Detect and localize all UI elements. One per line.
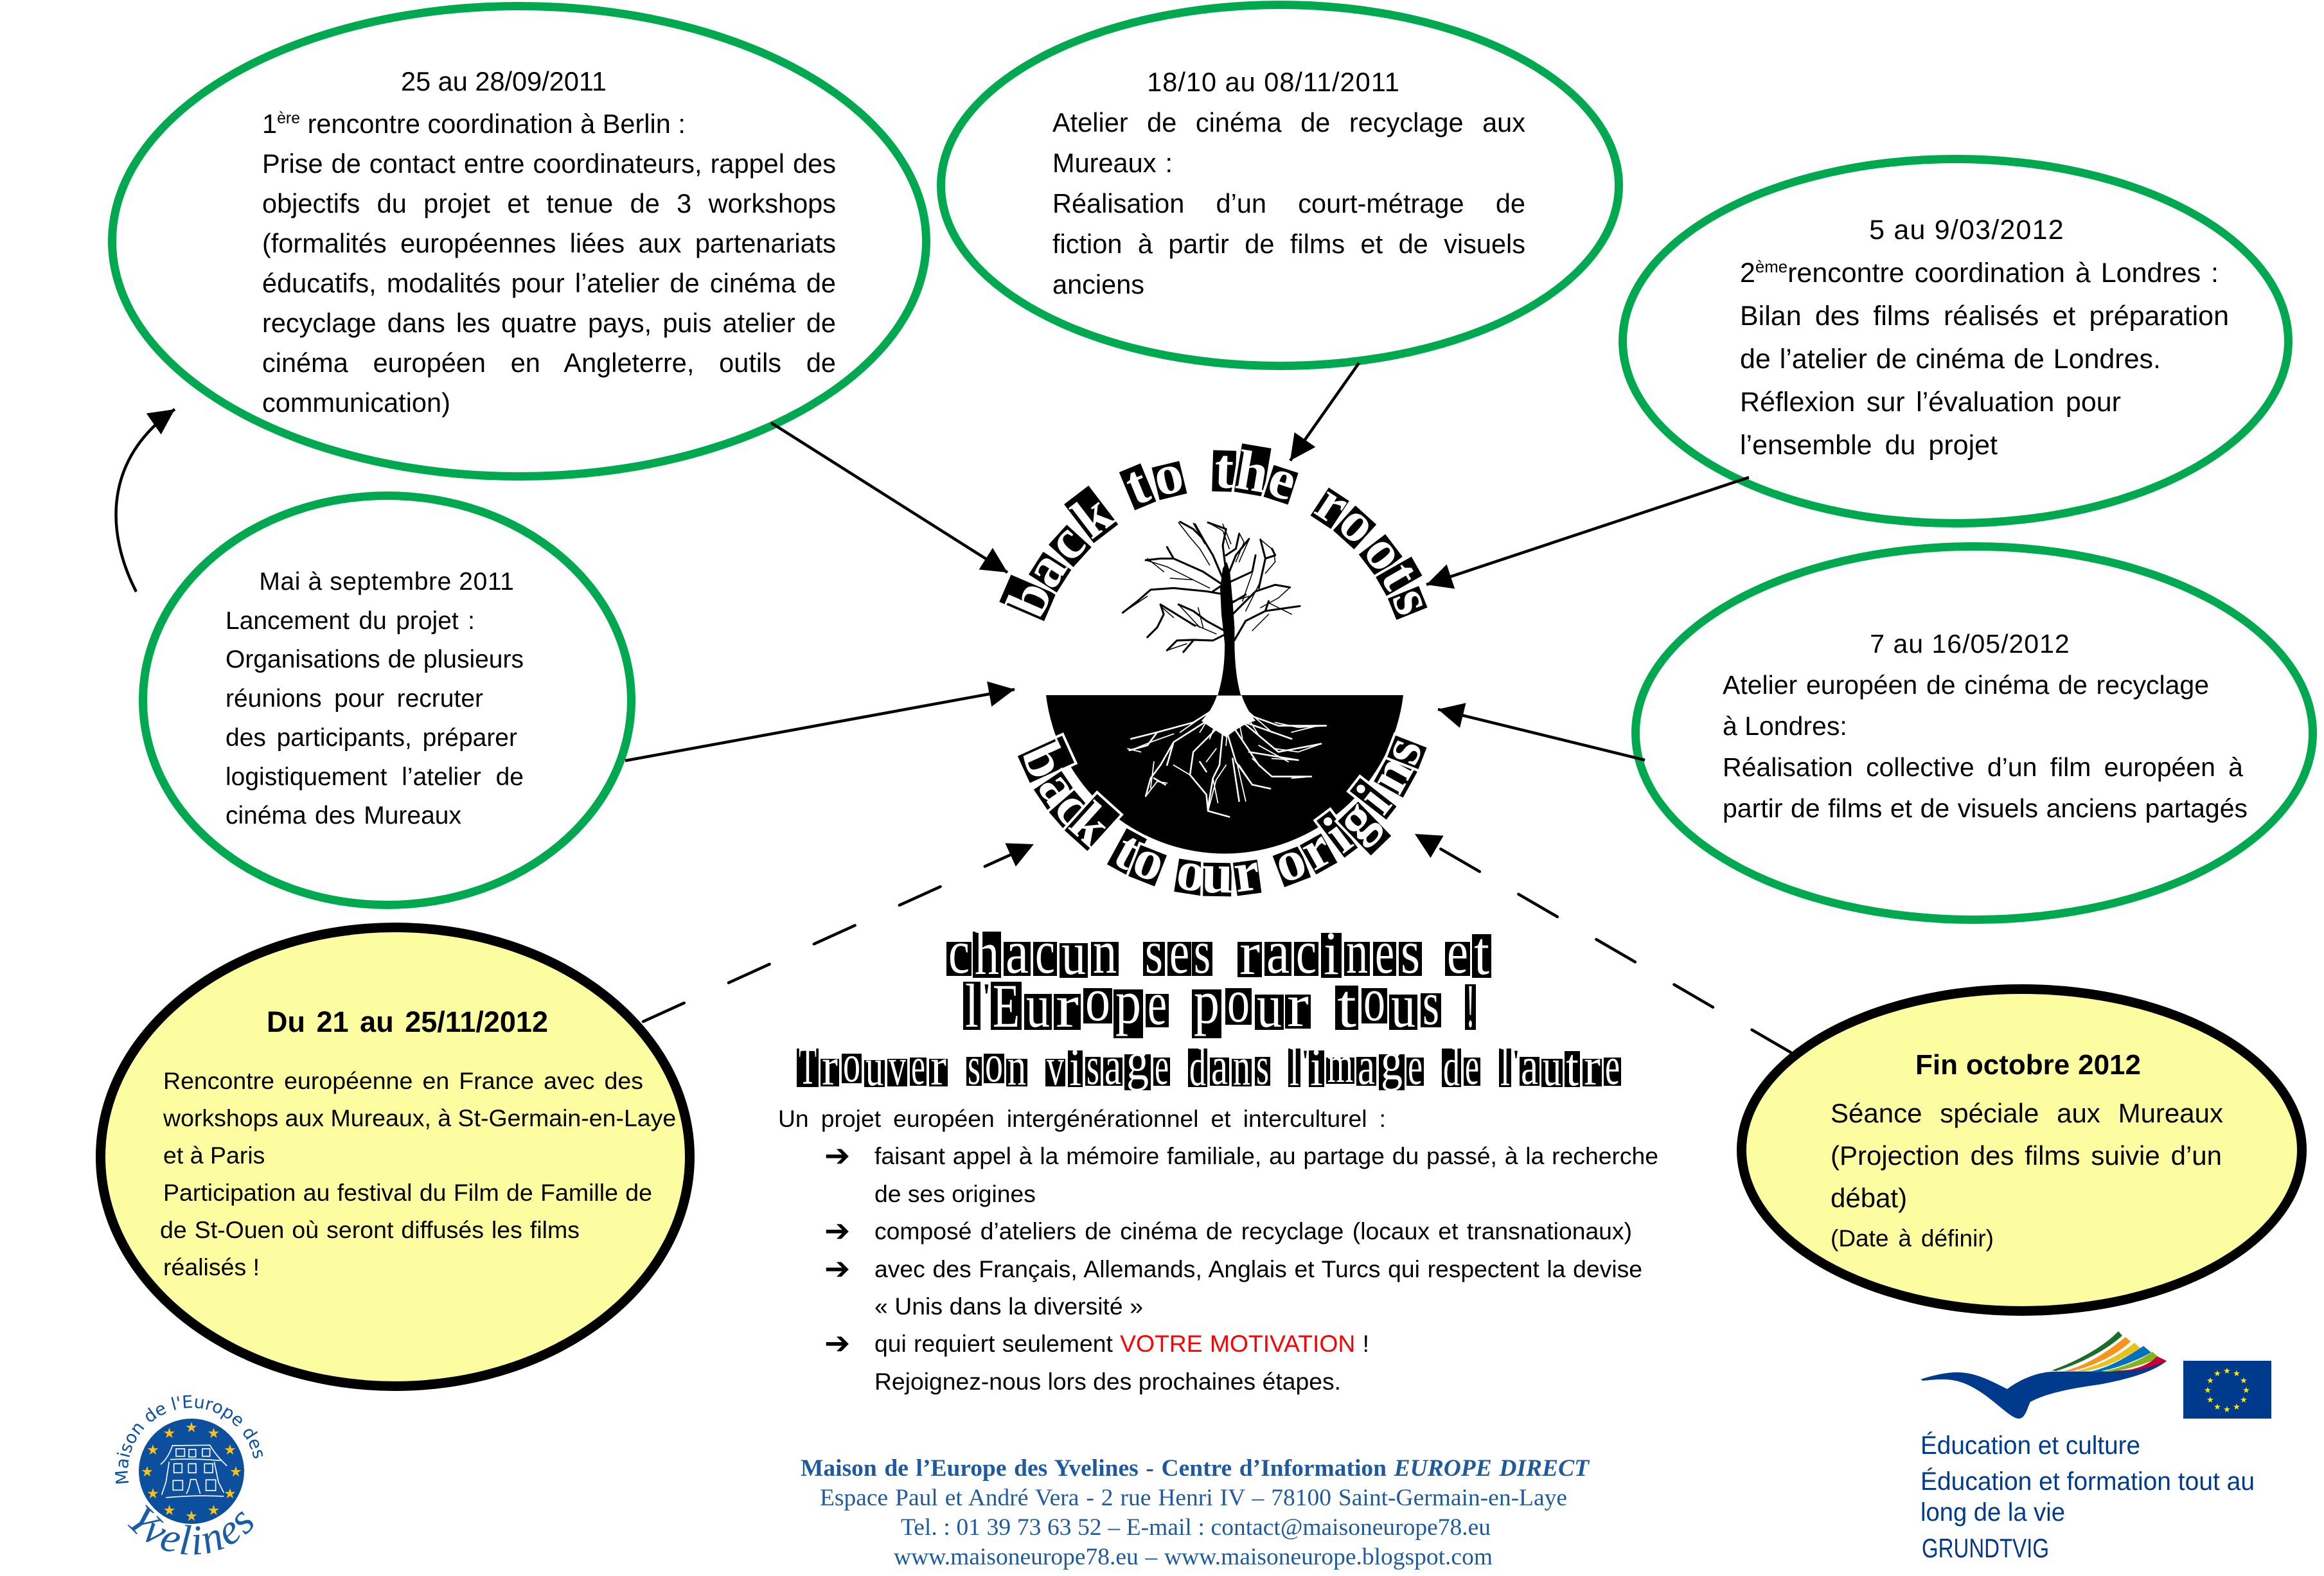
text: project launch: cinéma des Mureaux: [226, 802, 461, 829]
text: Mureaux workshop: Atelier de cinéma de recyclage aux: [1052, 107, 1525, 137]
text: meeting in France: Rencontre européenne en France avec des: [163, 1067, 643, 1094]
bullet 4: qui requiert seulement VOTRE MOTIVATION !: [874, 1330, 1369, 1357]
logo: Maison de l'Europe des Yvelines: ★: [163, 1503, 175, 1519]
bullet 1: ➔: [824, 1138, 850, 1174]
title: chacun ses racines et: r: [1239, 919, 1260, 987]
text: special screening: (Date à définir): [1831, 1225, 1994, 1252]
logo lettering: back to our origins: i: [1345, 774, 1403, 825]
logo: Maison de l'Europe des Yvelines: ★: [224, 1442, 236, 1458]
text: London workshop: Atelier européen de cinéma de recyclage: [1723, 670, 2209, 700]
subtitle: Trouver son visage dans l'image de l'autre: ': [1302, 1043, 1308, 1079]
subtitle: Trouver son visage dans l'image de l'autre: a: [1211, 1036, 1228, 1096]
arrow: curved launch to Berlin: [116, 409, 175, 592]
subtitle: Trouver son visage dans l'image de l'autre: l: [1500, 1038, 1510, 1097]
subtitle: Trouver son visage dans l'image de l'autre: s: [1256, 1036, 1269, 1096]
arrow: launch to logo: [625, 689, 1015, 761]
logo lettering: back to our origins: u: [1201, 843, 1234, 905]
icon: EU flag: ★: [2240, 1395, 2248, 1405]
bullet 2: ➔: [824, 1213, 850, 1249]
subtitle: Trouver son visage dans l'image de l'autre: i: [1069, 1038, 1081, 1097]
panel: 18/10 au 08/11/2011 recycling cinema workshop: [937, 1, 1623, 370]
title: l'Europe pour tous !: p: [1115, 968, 1141, 1036]
subtitle: Trouver son visage dans l'image de l'autre: g: [1381, 1032, 1403, 1092]
subtitle: Trouver son visage dans l'image de l'autre: d: [1189, 1038, 1206, 1097]
title: chacun ses racines et: s: [1401, 917, 1420, 986]
logo lettering: back to the roots: k: [1061, 482, 1124, 551]
subtitle: Trouver son visage dans l'image de l'autre: a: [1521, 1036, 1538, 1096]
title: l'Europe pour tous !: r: [1056, 971, 1079, 1040]
title: chacun ses racines et: i: [1324, 919, 1339, 987]
logo lettering: back to our origins: a: [1026, 759, 1094, 818]
logo lettering: back to our origins: r: [1290, 816, 1342, 883]
icon: EU flag: ★: [2242, 1386, 2250, 1395]
title: l'Europe pour tous !: p: [1194, 968, 1220, 1036]
text: Education et culture GRUNDTVIG: long de la vie: [1920, 1498, 2065, 1527]
text: meeting in France: de St-Ouen où seront diffusés les films: [160, 1216, 580, 1243]
text: project launch: logistiquement l’atelier de: [226, 763, 524, 791]
text: meeting in France: workshops aux Mureaux, à St-Germain-en-Laye: [163, 1104, 676, 1131]
text: !: [1466, 971, 1475, 1040]
subtitle: Trouver son visage dans l'image de l'autre: e: [1605, 1036, 1620, 1096]
logo: Maison de l'Europe des Yvelines: ★: [185, 1509, 198, 1525]
bullet 1: de ses origines: [874, 1180, 1036, 1207]
title: l'Europe pour tous !: t: [1337, 971, 1356, 1040]
title: l'Europe pour tous !: r: [1287, 971, 1309, 1040]
logo lettering: back to the roots: s: [1379, 579, 1446, 623]
panel: 5 au 9/03/2012 London coordination meeting: [1619, 155, 2293, 527]
footer: contact details: Maison de l’Europe des Yvelines - Centre d’Information EUROPE DIRECT: [801, 1455, 1589, 1482]
title: chacun ses racines et: s: [1194, 917, 1211, 986]
icon: EU flag: [2183, 1361, 2271, 1419]
bullet 3: [824, 1251, 1642, 1320]
text: Mureaux workshop: anciens: [1052, 269, 1144, 299]
subtitle: Trouver son visage dans l'image de l'autre: a: [1358, 1036, 1375, 1096]
text: London meeting: Bilan des films réalisés et préparation: [1740, 301, 2229, 332]
logo lettering: back to the roots: t: [1117, 453, 1158, 518]
icon: EU flag: ★: [2206, 1395, 2214, 1405]
title: chacun ses racines et: e: [1447, 917, 1468, 986]
logo lettering: back to our origins: b: [1009, 733, 1079, 788]
subtitle: Trouver son visage dans l'image de l'autre: [797, 1032, 1621, 1097]
text: Berlin meeting: (formalités européennes liées aux partenariats: [262, 228, 836, 258]
text: special screening: (Projection des films suivie d’un: [1831, 1140, 2222, 1171]
title: l'Europe pour tous !: E: [993, 971, 1020, 1040]
title: l'Europe pour tous !: ': [983, 976, 990, 1018]
footer: contact details: Espace Paul et André Vera - 2 rue Henri IV – 78100 Saint-Germain-en-Laye: [820, 1485, 1567, 1511]
logo: Lifelong learning programme bird: [1920, 1331, 2167, 1419]
subtitle: Trouver son visage dans l'image de l'autre: s: [1087, 1036, 1099, 1096]
illustration: tree and roots: [1122, 522, 1326, 817]
text: project launch: Lancement du projet :: [226, 607, 475, 635]
text: special screening: débat): [1831, 1183, 1907, 1213]
text: project launch: [226, 568, 524, 829]
subtitle: Trouver son visage dans l'image de l'autre: v: [889, 1037, 906, 1097]
subtitle: Trouver son visage dans l'image de l'autre: g: [1126, 1032, 1149, 1092]
text: Berlin meeting: communication): [262, 387, 450, 418]
bullet 1: faisant appel à la mémoire familiale, au partage du passé, à la recherche: [874, 1142, 1658, 1169]
title: l'Europe pour tous !: e: [1148, 969, 1167, 1038]
bullet 1: [824, 1138, 1658, 1207]
subtitle: Trouver son visage dans l'image de l'autre: e: [1408, 1036, 1423, 1096]
icon: EU flag: ★: [2213, 1369, 2221, 1379]
bullet 4: [824, 1325, 1369, 1395]
text: Berlin meeting: objectifs du projet et tenue de 3 workshops: [262, 188, 836, 218]
text: project launch: Organisations de plusieurs: [226, 646, 524, 673]
subtitle: Trouver son visage dans l'image de l'autre: n: [1007, 1037, 1026, 1097]
text: meeting in France: [160, 1067, 676, 1280]
logo lettering: back to the roots: c: [1034, 512, 1097, 572]
logo lettering: back to the roots: h: [1232, 439, 1273, 506]
subtitle: Trouver son visage dans l'image de l'autre: d: [1443, 1038, 1460, 1097]
logo: Maison de l'Europe des Yvelines: ★: [141, 1464, 154, 1480]
text: project launch: Mai à septembre 2011: [259, 568, 515, 596]
logo lettering: back to our origins: c: [1042, 777, 1106, 837]
title: chacun ses racines et: e: [1169, 917, 1189, 986]
panel: 7 au 16/05/2012 European workshop in London: [1631, 542, 2317, 924]
logo: Maison de l'Europe des Yvelines: ★: [229, 1464, 242, 1480]
subtitle: Trouver son visage dans l'image de l'autre: r: [930, 1037, 946, 1097]
title: chacun ses racines et: c: [1296, 917, 1317, 986]
panel: Fin octobre 2012 special screening: [1737, 984, 2307, 1316]
text: Berlin meeting: 1ère rencontre coordination à Berlin :: [262, 109, 686, 139]
bullet 4: ➔: [824, 1325, 850, 1361]
arrow: London meeting to logo: [1426, 477, 1749, 585]
icon: EU flag: ★: [2233, 1403, 2240, 1412]
title: chacun ses racines et: a: [1266, 917, 1290, 986]
icon: EU flag: ★: [2206, 1376, 2214, 1386]
arrow: Berlin to logo: [771, 423, 1007, 572]
subtitle: Trouver son visage dans l'image de l'autre: a: [1104, 1036, 1121, 1096]
logo lettering: back to our origins: g: [1324, 787, 1388, 852]
text: Berlin meeting: 25 au 28/09/2011: [401, 66, 607, 96]
text: London workshop: Réalisation collective d’un film européen à: [1723, 752, 2243, 782]
logo lettering: back to the roots: o: [1147, 441, 1189, 509]
footer: contact details: [801, 1455, 1590, 1570]
subtitle: Trouver son visage dans l'image de l'autre: u: [1543, 1038, 1561, 1097]
icon: EU flag: ★: [2223, 1367, 2231, 1376]
title: l'Europe pour tous !: u: [1026, 971, 1050, 1040]
footer: contact details: Tel. : 01 39 73 63 52 – E-mail : contact@maisoneurope78.eu: [901, 1514, 1491, 1541]
text: London workshop: 7 au 16/05/2012: [1870, 629, 2070, 659]
logo lettering: back to the roots: t: [1214, 438, 1234, 501]
logo: Maison de l'Europe des Yvelines: ★: [146, 1442, 159, 1458]
text: project launch: réunions pour recruter: [226, 685, 483, 713]
logo lettering: back to the roots: e: [1261, 446, 1304, 513]
arrow: London workshop to logo: [1438, 709, 1645, 760]
text: London meeting: [1740, 215, 2229, 461]
logo lettering: back to the roots: o: [1327, 491, 1390, 556]
subtitle: Trouver son visage dans l'image de l'autre: e: [911, 1036, 925, 1096]
text: London meeting: Réflexion sur l’évaluation pour: [1740, 387, 2121, 418]
subtitle: Trouver son visage dans l'image de l'autre: u: [865, 1038, 883, 1097]
subtitle: Trouver son visage dans l'image de l'autre: s: [968, 1036, 980, 1096]
title: chacun ses racines et: h: [975, 919, 999, 987]
logo lettering: back to our origins: k: [1058, 790, 1123, 858]
text block: project description: Un projet européen intergénérationnel et interculturel :: [778, 1105, 1386, 1132]
text: Berlin meeting: [262, 66, 836, 418]
logo lettering: back to our origins: [1009, 727, 1435, 905]
subtitle: Trouver son visage dans l'image de l'autre: l: [1290, 1038, 1299, 1097]
text: Berlin meeting: éducatifs, modalités pour l’atelier de cinéma de: [262, 268, 836, 298]
logo lettering: back to our origins: t: [1104, 819, 1151, 882]
title: chacun ses racines et: s: [1145, 917, 1163, 986]
title: chacun ses racines et: c: [1035, 917, 1055, 986]
text: Mureaux workshop: [1052, 67, 1525, 299]
title: chacun ses racines et: a: [1006, 917, 1029, 986]
text: Education et culture GRUNDTVIG: [1920, 1431, 2255, 1563]
logo: Maison de l'Europe des Yvelines: ★: [146, 1486, 159, 1502]
text: meeting in France: réalisés !: [163, 1253, 260, 1280]
title: chacun ses racines et: e: [1375, 917, 1394, 986]
heading: Fin octobre 2012: Fin octobre 2012: [1915, 1049, 2141, 1081]
logo lettering: back to our origins: o: [1173, 839, 1210, 905]
bullet 4: Rejoignez-nous lors des prochaines étapes.: [874, 1368, 1341, 1395]
text: meeting in France: et à Paris: [163, 1142, 265, 1169]
subtitle: Trouver son visage dans l'image de l'autre: o: [843, 1034, 860, 1093]
text: London meeting: 2èmerencontre coordination à Londres :: [1740, 258, 2219, 288]
logo lettering: back to the roots: a: [1011, 540, 1079, 598]
title: l'Europe pour tous !: u: [1391, 971, 1415, 1040]
logo: Maison de l'Europe des Yvelines: ★: [208, 1503, 220, 1519]
subtitle: Trouver son visage dans l'image de l'autre: ': [1513, 1043, 1519, 1079]
text: Mureaux workshop: 18/10 au 08/11/2011: [1147, 67, 1400, 97]
title: l'Europe pour tous !: l: [965, 971, 979, 1040]
icon: EU flag: ★: [2233, 1369, 2240, 1379]
title: chacun ses racines et: u: [1061, 919, 1086, 987]
logo lettering: back to our origins: s: [1369, 729, 1435, 772]
logo: Maison de l'Europe des Yvelines: ★: [163, 1426, 175, 1442]
logo lettering: back to our origins: i: [1313, 805, 1363, 865]
title: chacun ses racines et: c: [948, 917, 970, 986]
text: Mureaux workshop: Mureaux :: [1052, 148, 1173, 178]
logo lettering: back to the roots: b: [995, 572, 1065, 626]
text: London workshop: [1723, 629, 2248, 823]
panel: 25 au 28/09/2011 Berlin coordination meeting: [108, 2, 930, 481]
text: special screening: Séance spéciale aux Mureaux: [1831, 1098, 2223, 1128]
subtitle: Trouver son visage dans l'image de l'autre: t: [1566, 1038, 1579, 1097]
title: l'Europe pour tous !: o: [1363, 965, 1385, 1034]
title: l'Europe pour tous !: o: [1085, 965, 1110, 1034]
logo lettering: back to our origins: r: [1230, 840, 1263, 905]
title: l'Europe pour tous !: [963, 965, 1476, 1040]
heading: Du 21 au 25/11/2012: Du 21 au 25/11/2012: [267, 1005, 548, 1038]
text: special screening: [1831, 1098, 2223, 1252]
text: Education et culture GRUNDTVIG: GRUNDTVIG: [1922, 1533, 2049, 1563]
text: Education et culture GRUNDTVIG: Éducation et culture: [1920, 1431, 2140, 1460]
title: l'Europe pour tous !: s: [1423, 969, 1439, 1038]
text: London meeting: de l’atelier de cinéma de Londres.: [1740, 344, 2161, 375]
title: chacun ses racines et: [946, 917, 1491, 987]
subtitle: Trouver son visage dans l'image de l'autre: m: [1327, 1034, 1353, 1094]
bullet 3: ➔: [824, 1251, 850, 1287]
arrow: workshop to logo: [1290, 363, 1359, 461]
title: chacun ses racines et: n: [1346, 917, 1368, 986]
text: London meeting: 5 au 9/03/2012: [1869, 215, 2064, 245]
text: Berlin meeting: Prise de contact entre coordinateurs, rappel des: [262, 148, 836, 179]
panel: Mai à septembre 2011 project launch: [139, 491, 635, 909]
title: l'Europe pour tous !: u: [1257, 971, 1282, 1040]
text: London meeting: l’ensemble du projet: [1740, 430, 1998, 461]
subtitle: Trouver son visage dans l'image de l'autre: r: [1584, 1037, 1601, 1097]
text: Mureaux workshop: Réalisation d’un court-métrage de: [1052, 188, 1525, 218]
text: Education et culture GRUNDTVIG: Éducation et formation tout au: [1920, 1467, 2255, 1496]
subtitle: Trouver son visage dans l'image de l'autre: o: [985, 1034, 1003, 1093]
icon: EU flag: ★: [2204, 1386, 2212, 1395]
logo: Maison de l'Europe des Yvelines: Yvelines: [127, 1505, 253, 1555]
title: chacun ses racines et: t: [1474, 919, 1489, 987]
subtitle: Trouver son visage dans l'image de l'autre: n: [1233, 1037, 1250, 1097]
text: London workshop: à Londres:: [1723, 711, 1847, 741]
subtitle: Trouver son visage dans l'image de l'autre: e: [1155, 1036, 1169, 1096]
text: project launch: des participants, préparer: [226, 724, 517, 752]
logo lettering: back to the roots: [995, 438, 1446, 626]
logo: half circle ground: [1046, 695, 1403, 854]
logo lettering: back to the roots: t: [1369, 552, 1432, 599]
logo: Maison de l'Europe des Yvelines: [115, 1395, 263, 1555]
text: Berlin meeting: cinéma européen en Angleterre, outils de: [262, 348, 836, 378]
text: London workshop: partir de films et de visuels anciens partagés: [1723, 793, 2248, 823]
subtitle: Trouver son visage dans l'image de l'autre: i: [1310, 1038, 1323, 1097]
arrow: dashed left: [643, 844, 1034, 1022]
logo lettering: back to the roots: o: [1352, 522, 1418, 582]
text: Berlin meeting: recyclage dans les quatre pays, puis atelier de: [262, 308, 836, 338]
subtitle: Trouver son visage dans l'image de l'autre: r: [822, 1037, 838, 1097]
footer: contact details: www.maisoneurope78.eu – www.maisoneurope.blogspot.com: [894, 1544, 1493, 1570]
title: l'Europe pour tous !: o: [1227, 966, 1250, 1035]
logo: Maison de l'Europe des Yvelines: ★: [208, 1426, 220, 1442]
bullet 3: avec des Français, Allemands, Anglais et Turcs qui respectent la devise: [874, 1255, 1642, 1282]
logo: Maison de l'Europe des Yvelines: Maison de l'Europe des: [115, 1395, 263, 1484]
icon: EU flag: ★: [2213, 1403, 2221, 1412]
icon: EU flag: ★: [2223, 1405, 2231, 1415]
text: meeting in France: Participation au festival du Film de Famille de: [163, 1179, 652, 1206]
logo lettering: back to our origins: n: [1356, 745, 1426, 803]
bullet 3: « Unis dans la diversité »: [874, 1293, 1143, 1320]
logo lettering: back to our origins: o: [1125, 826, 1174, 895]
arrow: dashed right: [1415, 834, 1791, 1052]
subtitle: Trouver son visage dans l'image de l'autre: v: [1047, 1037, 1064, 1097]
panel: Du 21 au 25/11/2012 meeting in France: [96, 923, 695, 1391]
text block: project description: [778, 1105, 1658, 1395]
logo: Maison de l'Europe des Yvelines: ★: [185, 1420, 198, 1436]
logo lettering: back to our origins: o: [1266, 828, 1314, 896]
subtitle: Trouver son visage dans l'image de l'autre: T: [799, 1036, 817, 1096]
bullet 2: composé d’ateliers de cinéma de recyclage (locaux et transnationaux): [874, 1217, 1632, 1244]
icon: EU flag: ★: [2240, 1376, 2248, 1386]
subtitle: Trouver son visage dans l'image de l'autre: e: [1465, 1036, 1479, 1096]
text: Mureaux workshop: fiction à partir de films et de visuels: [1052, 229, 1525, 259]
logo lettering: back to the roots: r: [1305, 471, 1360, 536]
title: chacun ses racines et: n: [1093, 917, 1117, 986]
logo: Maison de l'Europe des Yvelines: ★: [224, 1486, 236, 1502]
